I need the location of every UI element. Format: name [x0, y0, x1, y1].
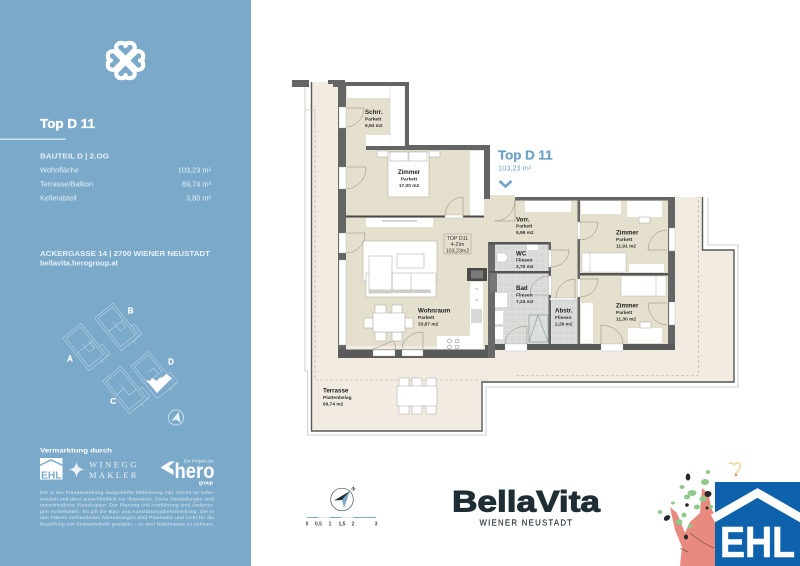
room label: WC: 2,70 m2 — [516, 264, 534, 270]
room label: apartment box: TOP D11 — [447, 236, 468, 242]
building A — [63, 321, 112, 373]
compass and scale: 1 — [329, 522, 332, 528]
logo: Winegg Makler: MAKLER — [89, 470, 137, 480]
text block: disclaimer: unverbindliche Planskopien. Der Planung und Ausführung sind Änderun- — [40, 502, 214, 509]
room label: Vorraum: Parkett — [516, 224, 533, 230]
furniture: east bedrooms — [525, 201, 666, 343]
room label: apartment box: 4-Zim — [451, 242, 465, 248]
room label: apartment box: 103,23m2 — [446, 248, 469, 254]
icon: site north arrow — [168, 410, 184, 425]
room label: Vorraum — [516, 216, 534, 236]
icon: small heart — [729, 463, 740, 474]
room label: Schrank: Schrr. — [365, 109, 383, 116]
text block: areas table: BAUTEIL D | 2.OG — [40, 152, 109, 160]
text block: areas table: Wohnfläche — [40, 166, 79, 174]
logo: EHL small — [40, 458, 63, 482]
building C — [103, 364, 152, 416]
room label: Abstellraum: Fliesen — [555, 315, 572, 321]
room label: Schrank: Parkett — [365, 117, 382, 123]
building letters: C — [110, 397, 116, 406]
icon: down chevron — [500, 181, 512, 186]
logo: EHL large — [713, 482, 800, 566]
logo: Bella Vita — [452, 486, 600, 528]
panel: blue sidebar — [0, 0, 251, 566]
callout: apartment label on plan: Top D 11 — [498, 148, 553, 162]
compass and scale: 3 — [375, 522, 378, 528]
room label: Wohnraum: Parkett — [418, 315, 435, 321]
compass and scale: 2 — [352, 522, 355, 528]
compass and scale — [306, 486, 378, 528]
room label: Zimmer north — [398, 169, 421, 189]
compass and scale: N — [350, 486, 356, 493]
text block: disclaimer: Die in der Plandarstellung dargestellte Möblierung inkl. Küche ist sche- — [40, 490, 214, 496]
text block: disclaimer — [40, 490, 214, 528]
parkett floors — [346, 84, 670, 346]
room label: Zimmer north: Zimmer — [398, 169, 421, 176]
furniture: bedroom and closet north — [347, 85, 484, 216]
callout: apartment label on plan: 103,23 m² — [498, 164, 532, 172]
text block: areas table: 69,74 m² — [182, 180, 212, 188]
text block: address: bellavita.herogroup.at — [40, 258, 119, 268]
building letters: B — [128, 306, 134, 316]
room label: Wohnraum — [418, 308, 451, 328]
logo: hero group — [160, 458, 214, 486]
room label: Bad: Bad — [516, 285, 528, 292]
room label: Wohnraum: Wohnraum — [418, 308, 451, 314]
room label: Wohnraum: 33,87 m2 — [418, 322, 439, 328]
room label: WC: WC — [516, 250, 527, 258]
text block: disclaimer: den Plänen vorhandenen Abmessungen sind Planmaße und nicht für die — [40, 515, 214, 521]
callout: apartment label on plan — [498, 148, 553, 186]
building letters: A — [67, 354, 73, 364]
room label: Abstellraum — [555, 308, 573, 328]
logo: hero group: group — [199, 480, 213, 486]
room label: apartment box — [444, 234, 471, 254]
text block: areas table: 3,80 m² — [186, 194, 212, 202]
text block: address — [40, 249, 211, 268]
tiled rooms — [491, 244, 578, 344]
room label: Schrank — [365, 109, 383, 129]
room label: Zimmer east lower: Zimmer — [616, 302, 639, 310]
logo: Winegg Makler: WINEGG — [89, 460, 136, 470]
terrace — [292, 80, 738, 435]
furniture: living room — [363, 218, 437, 341]
logo: hero group: hero — [174, 460, 214, 483]
site plan: buildings — [63, 301, 180, 416]
heading: marketing: Vermarktung durch — [40, 448, 112, 454]
heading: apartment title: Top D 11 — [40, 117, 95, 131]
room label: Zimmer east upper: Zimmer — [616, 230, 639, 236]
text block: disclaimer: Bestellung von Einbaumöbeln geeignet – es sind Naturmasse zu nehmen. — [40, 522, 214, 528]
text block: areas table: Terrasse/Balkon — [40, 180, 93, 188]
building B — [95, 301, 144, 353]
room label: Terrasse — [323, 388, 352, 408]
icon: clover logo — [108, 43, 143, 78]
compass and scale: 1,5 — [339, 522, 346, 528]
furniture: bathroom — [493, 244, 548, 342]
furniture: kitchen — [437, 282, 483, 349]
room label: Terrasse: Plattenbelag — [323, 395, 352, 401]
text block: areas table — [40, 152, 212, 202]
building D — [131, 349, 180, 401]
logo: Bella Vita: BellaVita — [452, 486, 600, 518]
room label: Bad: Fliesen — [516, 292, 533, 298]
room label: Terrasse: 69,74 m2 — [323, 402, 344, 408]
text block: disclaimer: gen vorbehalten. Es gilt die Bau- und Ausstattungsbeschreibung. Die in — [40, 509, 214, 515]
building letters: D — [168, 358, 174, 366]
text block: disclaimer: matisch und dient ausschließlich zur Illustration. Diese Darstellungen sind — [40, 496, 214, 502]
building letters — [67, 306, 174, 406]
text block: areas table: 103,23 m² — [178, 166, 212, 174]
room label: Zimmer east upper: 11,91 m2 — [616, 244, 636, 250]
room label: Zimmer east upper: Parkett — [616, 237, 633, 243]
room label: Zimmer east lower: 11,30 m2 — [616, 316, 636, 322]
illustration: hand with leaves — [658, 463, 740, 566]
room label: Terrasse: Terrasse — [323, 388, 349, 394]
room label: Zimmer east lower: Parkett — [616, 310, 633, 316]
floor plan — [292, 80, 738, 435]
doors and windows — [339, 107, 675, 356]
room label: Bad — [516, 285, 534, 305]
logo: hero group: Ein Projekt der — [184, 458, 214, 464]
text block: areas table: Kellerabteil — [40, 194, 77, 202]
logo: EHL small: EHL — [41, 470, 62, 482]
terrace table and chairs — [397, 378, 437, 414]
room label: Zimmer north: 17,00 m2 — [399, 183, 419, 189]
room label: Abstellraum: Abstr. — [555, 308, 573, 314]
room label: WC — [516, 250, 534, 270]
logo: Bella Vita: WIENER NEUSTADT — [480, 518, 572, 528]
text block: address: ACKERGASSE 14 | 2700 WIENER NEUSTADT — [40, 249, 211, 258]
room label: Zimmer east upper — [616, 230, 639, 250]
room label: Abstellraum: 2,29 m2 — [555, 322, 573, 328]
room label: Schrank: 6,94 m2 — [365, 123, 383, 129]
logo: Winegg Makler — [68, 460, 137, 480]
room label: Zimmer north: Parkett — [401, 176, 418, 182]
room label: Vorraum: Vorr. — [516, 216, 530, 224]
walls — [338, 82, 675, 358]
compass and scale: 0,5 — [315, 522, 322, 528]
room label: Vorraum: 9,98 m2 — [516, 230, 534, 236]
highlighted apartment in building D — [146, 374, 172, 393]
compass and scale: 0 — [306, 522, 309, 528]
room label: WC: Fliesen — [516, 258, 533, 264]
room label: Zimmer east lower — [616, 302, 639, 322]
room label: Bad: 7,24 m2 — [516, 299, 534, 305]
